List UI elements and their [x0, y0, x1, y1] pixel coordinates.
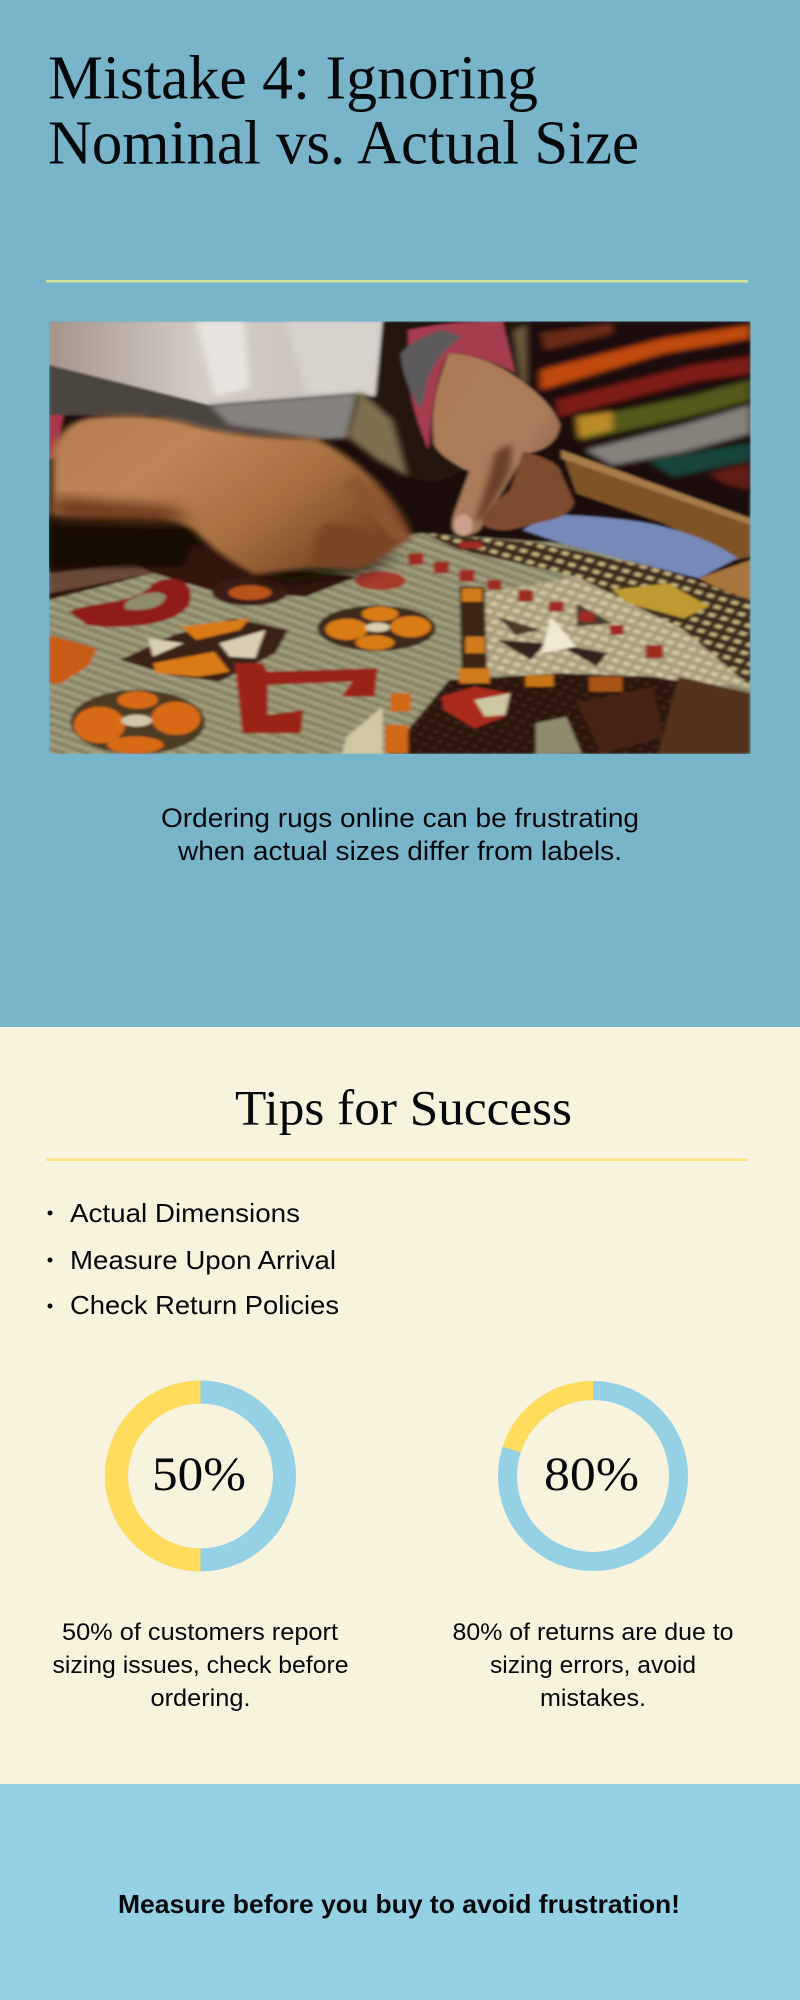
sweater	[49, 321, 383, 460]
footer background	[0, 1784, 800, 2000]
caption: 50% stat: 50% of customers report	[62, 1619, 338, 1646]
caption: 50% stat	[52, 1619, 348, 1712]
call to action text: Measure before you buy to avoid frustration!	[118, 1889, 680, 1919]
right cream and orange small motifs	[342, 707, 383, 754]
tips list: Actual Dimensions	[70, 1198, 300, 1228]
caption: 80% stat: 80% of returns are due to	[452, 1619, 734, 1646]
header background	[0, 0, 800, 1027]
caption: 50% stat: sizing issues, check before	[52, 1652, 348, 1679]
small red flower top centre	[355, 571, 406, 590]
flower motif bottom left	[70, 690, 205, 754]
red hook motif	[235, 663, 378, 733]
panel: header with title and photo	[0, 0, 800, 1027]
caption: 50% stat: ordering.	[150, 1685, 250, 1712]
dark border of rug	[49, 543, 357, 600]
tips background	[0, 1027, 800, 1784]
donut chart: 50%: 50%	[152, 1448, 246, 1501]
left hand and arm	[53, 416, 412, 575]
stitched red marks	[408, 542, 663, 658]
wooden frame	[561, 450, 751, 600]
shadow under hands	[49, 517, 403, 583]
tips list: Check Return Policies	[70, 1290, 339, 1320]
tips list	[48, 1198, 339, 1320]
intro text: when actual sizes differ from labels.	[177, 836, 622, 866]
patterned stripe	[423, 533, 751, 687]
cream cross with orange	[120, 618, 288, 682]
title: Mistake 4: Ignoring	[48, 44, 538, 112]
intro text: Ordering rugs online can be frustrating	[161, 803, 639, 833]
panel: call to action	[0, 1784, 800, 2000]
blue cushion	[523, 515, 737, 578]
title	[48, 44, 639, 178]
donut chart: 50%	[116, 1392, 284, 1560]
panel: tips for success	[0, 1027, 800, 1784]
left edge orange motif	[49, 635, 97, 683]
tips heading: Tips for Success	[235, 1080, 572, 1136]
right hand	[433, 353, 574, 536]
title: Nominal vs. Actual Size	[48, 110, 639, 178]
caption: 80% stat: sizing errors, avoid	[490, 1652, 696, 1679]
background rug rolls	[528, 321, 751, 495]
heart motif	[69, 579, 191, 627]
photo: hands repairing a woven rug	[49, 321, 751, 754]
caption: 80% stat	[452, 1619, 734, 1712]
rug base	[49, 533, 751, 754]
intro text	[161, 803, 639, 866]
flower motif top	[212, 578, 288, 606]
caption: 80% stat: mistakes.	[540, 1685, 646, 1712]
triangle field	[485, 577, 751, 687]
donut chart: 80%: 80%	[544, 1448, 639, 1501]
tips list: Measure Upon Arrival	[70, 1245, 336, 1275]
dark lower-right area	[387, 672, 680, 754]
flower motif centre	[317, 606, 436, 651]
yellow patch	[612, 583, 709, 618]
red sleeve and background cloth	[347, 321, 533, 483]
donut chart: 80%	[508, 1390, 678, 1562]
